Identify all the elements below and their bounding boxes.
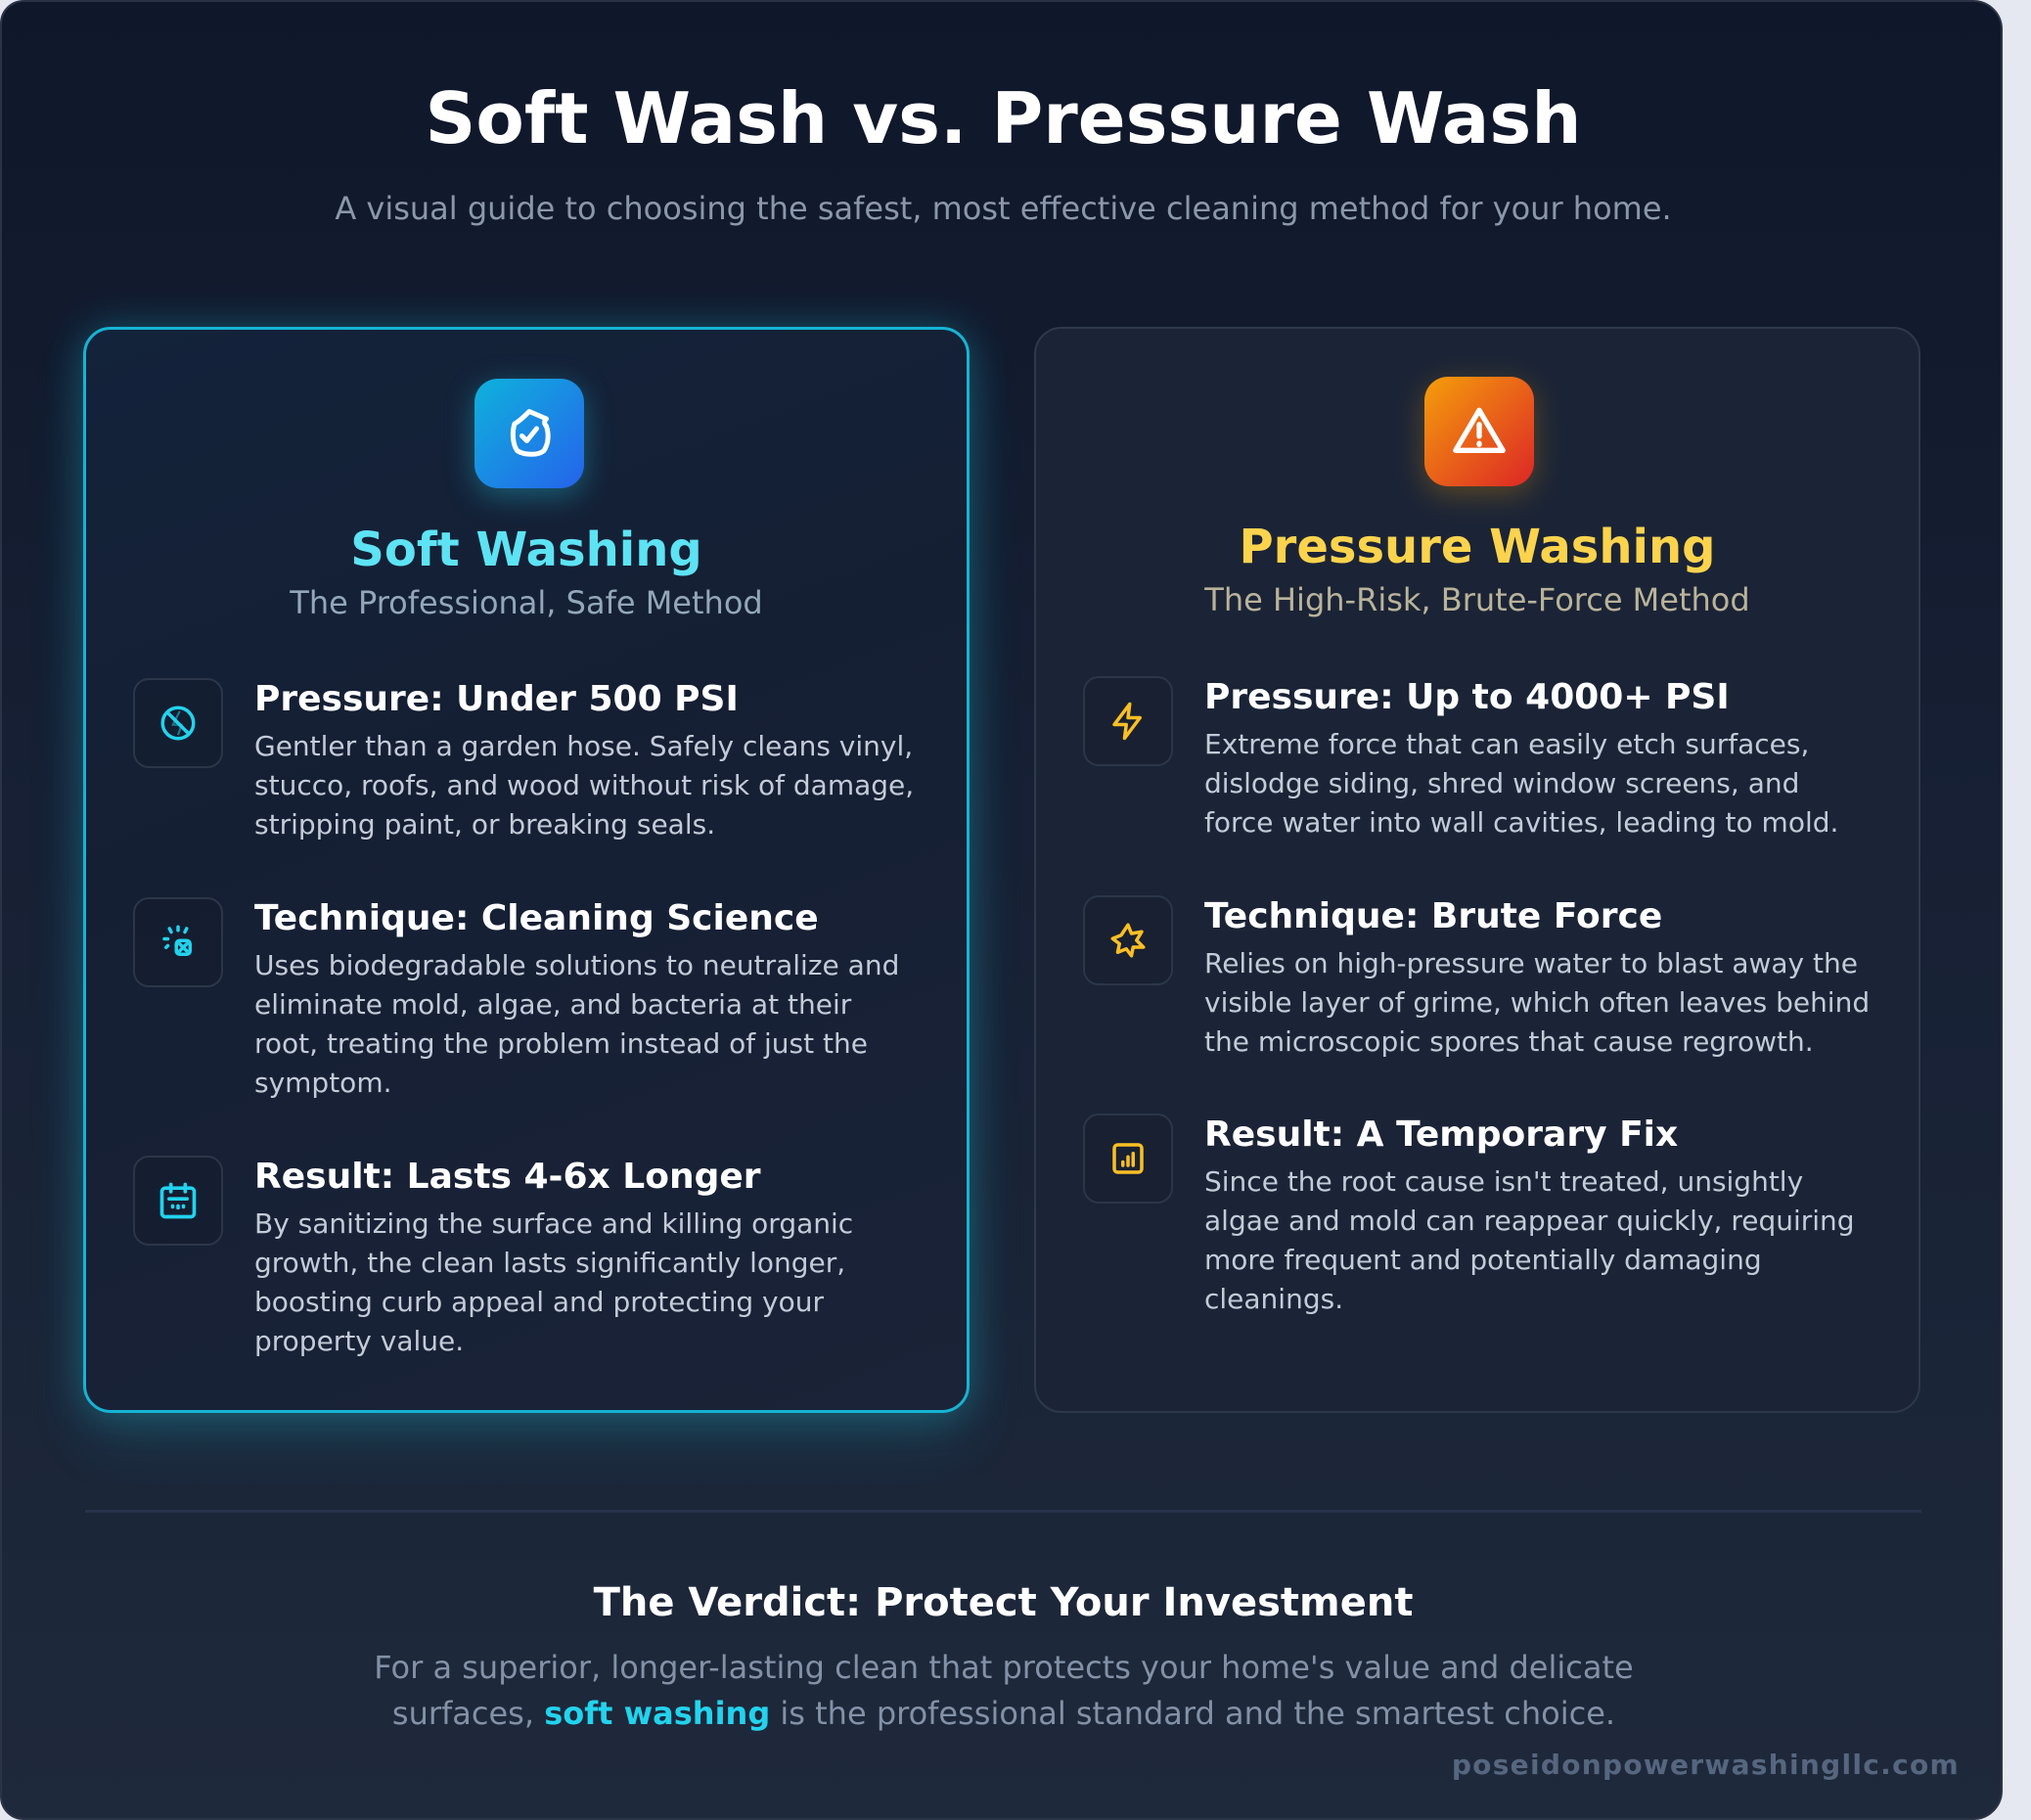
item: pressure: force water into wall cavities, leading to mold. (1204, 806, 1838, 839)
item: technique: eliminate mold, algae, and bacteria at their (254, 988, 851, 1021)
item: technique: Technique: Cleaning Science (254, 898, 819, 938)
item: result: algae and mold can reappear quickly, requiring (1204, 1205, 1855, 1237)
icon: sparkle (133, 897, 223, 987)
item: pressure: stripping paint, or breaking seals. (254, 808, 715, 841)
icon: bar chart (1083, 1114, 1173, 1204)
icon: shield check (474, 379, 584, 488)
item: result (1083, 1114, 1855, 1315)
item: pressure: Extreme force that can easily etch surfaces, (1204, 728, 1809, 760)
item: result: boosting curb appeal and protecting your (254, 1286, 824, 1318)
icon: calendar (133, 1156, 223, 1246)
item: technique (1083, 895, 1870, 1058)
icon: warning (1424, 377, 1534, 486)
item: technique: symptom. (254, 1067, 391, 1099)
icon: lightning (1083, 676, 1173, 766)
item: result: Since the root cause isn't treated, unsightly (1204, 1165, 1803, 1198)
item: technique: Relies on high-pressure water to blast away the (1204, 947, 1858, 979)
item: pressure: Gentler than a garden hose. Safely cleans vinyl, (254, 730, 913, 762)
item: technique (133, 897, 899, 1099)
icon: no pressure (133, 678, 223, 768)
subheading: The High-Risk, Brute-Force Method (1204, 581, 1750, 618)
panel: soft washing (83, 327, 970, 1413)
footer url: poseidonpowerwashingllc.com (1452, 1749, 1960, 1781)
item: result: Result: Lasts 4-6x Longer (254, 1157, 761, 1197)
verdict text: surfaces, soft washing is the professional standard and the smartest choice. (392, 1695, 1615, 1732)
panel: pressure washing (1034, 327, 1920, 1413)
item: result: growth, the clean lasts significantly longer, (254, 1247, 845, 1279)
item: result: cleanings. (1204, 1283, 1343, 1315)
item: pressure (133, 678, 914, 841)
title: Soft Wash vs. Pressure Wash (425, 77, 1581, 159)
item: technique: visible layer of grime, which often leaves behind (1204, 986, 1870, 1019)
item: pressure: dislodge siding, shred window screens, and (1204, 767, 1799, 799)
heading: soft washing: Soft Washing (350, 523, 702, 577)
item: pressure (1083, 676, 1838, 839)
verdict text (374, 1649, 1634, 1732)
item: pressure: Pressure: Under 500 PSI (254, 679, 739, 719)
heading: pressure washing: Pressure Washing (1239, 520, 1716, 574)
item: result: more frequent and potentially damaging (1204, 1244, 1762, 1276)
item: result (133, 1156, 853, 1357)
verdict text: For a superior, longer-lasting clean that protects your home's value and delicate (374, 1649, 1634, 1686)
subheading: The Professional, Safe Method (290, 584, 763, 621)
subtitle: A visual guide to choosing the safest, most effective cleaning method for your home. (335, 190, 1672, 227)
item: technique: the microscopic spores that cause regrowth. (1204, 1025, 1814, 1058)
icon: burst (1083, 895, 1173, 985)
item: result: property value. (254, 1325, 464, 1357)
verdict heading: The Verdict: Protect Your Investment (594, 1580, 1413, 1625)
item: technique: Technique: Brute Force (1204, 896, 1662, 936)
item: result: Result: A Temporary Fix (1204, 1115, 1678, 1155)
item: technique: root, treating the problem instead of just the (254, 1027, 868, 1060)
item: pressure: stucco, roofs, and wood without risk of damage, (254, 769, 914, 801)
item: technique: Uses biodegradable solutions to neutralize and (254, 949, 899, 981)
item: pressure: Pressure: Up to 4000+ PSI (1204, 677, 1730, 717)
item: result: By sanitizing the surface and killing organic (254, 1207, 853, 1240)
